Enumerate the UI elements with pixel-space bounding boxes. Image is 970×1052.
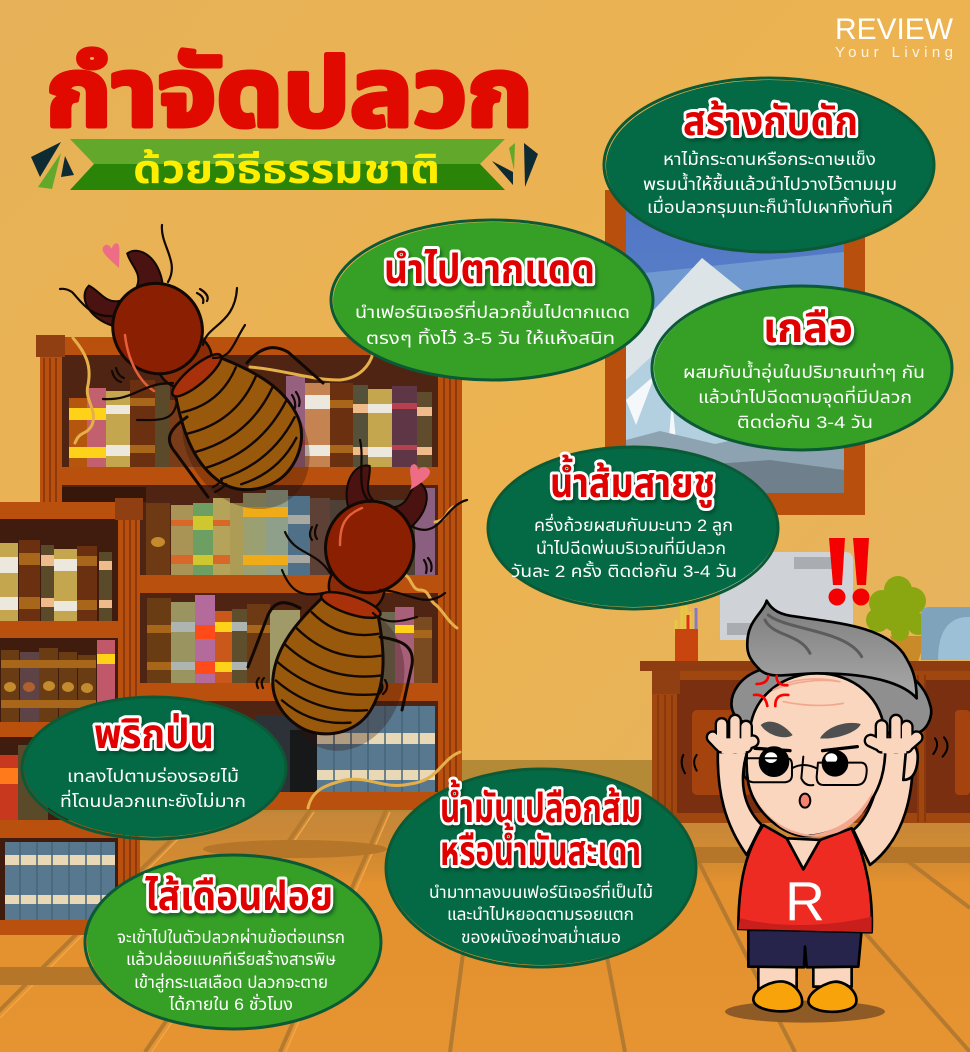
panel: sunlight: นำไปตากแดด [384, 246, 595, 292]
panel: chili [22, 697, 286, 839]
panel: sunlight: นำเฟอร์นิเจอร์ที่ปลวกขึ้นไปตากแดด [355, 300, 630, 322]
books: front third shelf [0, 745, 48, 820]
shirt: R [785, 870, 825, 932]
books: third shelf [147, 595, 432, 683]
panel: chili: พริกป่น [94, 711, 214, 757]
desk body [640, 661, 970, 823]
dado panel [0, 760, 970, 820]
panel: orange oil: หรือน้ำมันสะเดา [440, 822, 641, 874]
wooden floor [0, 810, 970, 1052]
back bookcase [36, 335, 462, 810]
back hair [731, 670, 931, 733]
books: bottom shelf [255, 706, 435, 792]
panel: orange oil: ของผนังอย่างสม่ำเสมอ [461, 925, 621, 947]
icon: heart 1 [103, 243, 119, 268]
panel: chili: ที่โดนปลวกแทะยังไม่มาก [60, 789, 246, 811]
exclamation marks [828, 538, 870, 606]
front bookcase [0, 498, 143, 935]
panel: salt: เกลือ [763, 305, 853, 351]
panel: salt [652, 286, 952, 450]
books: second shelf [146, 488, 435, 575]
shirt [738, 825, 872, 932]
panel: vinegar: น้ำส้มสายชู [550, 454, 715, 508]
logo: Your Living [835, 44, 953, 61]
panel: nematodes: จะเข้าไปในตัวปลวกผ่านข้อต่อแทรก [117, 927, 345, 947]
panel: nematodes [85, 854, 381, 1029]
arms [718, 740, 913, 865]
panel: vinegar: ครึ่งถ้วยผสมกับมะนาว 2 ลูก [534, 513, 733, 537]
termite trails [73, 338, 460, 808]
panel: traps: หาไม้กระดานหรือกระดาษแข็ง [663, 149, 876, 169]
panel: chili: เทลงไปตามร่องรอยไม้ [67, 766, 239, 786]
books: top shelf [69, 376, 432, 467]
nose [801, 757, 813, 785]
mouth [800, 794, 810, 808]
desk with items [640, 552, 970, 823]
legs [758, 963, 852, 988]
panel: nematodes: ได้ภายใน 6 ชั่วโมง [168, 993, 293, 1014]
panel: orange oil [386, 769, 697, 967]
head [747, 673, 885, 836]
books: front second shelf [1, 640, 115, 722]
eyebrows [761, 722, 861, 739]
glasses [744, 758, 867, 785]
panel: salt: ติดต่อกัน 3-4 วัน [737, 413, 873, 432]
logo [835, 13, 954, 61]
shadow [725, 1001, 885, 1023]
hands [713, 721, 917, 753]
shoes [753, 981, 856, 1012]
panel: traps: พรมน้ำให้ชื้นแล้วนำไปวางไว้ตามมุม [643, 172, 897, 195]
icon: heart 2 [410, 464, 430, 490]
panel: traps [604, 78, 934, 252]
termite 1 [60, 225, 336, 534]
ribbon subtitle [70, 139, 505, 192]
ribbon decoration left [31, 142, 74, 189]
panel: nematodes: เข้าสู่กระแสเลือด ปลวกจะตาย [134, 972, 328, 994]
panel: vinegar: วันละ 2 ครั้ง ติดต่อกัน 3-4 วัน [511, 560, 737, 581]
panel: orange oil: และนำไปหยอดตามรอยแตก [447, 905, 634, 924]
shorts [748, 930, 862, 967]
panel: sunlight [331, 220, 653, 380]
logo: REVIEW [835, 13, 954, 46]
panel: salt: ผสมกับน้ำอุ่นในปริมาณเท่าๆ กัน [683, 360, 925, 383]
shake marks [682, 737, 947, 773]
character: angry man [682, 601, 947, 1023]
eyes [755, 747, 857, 776]
pencil cup [675, 604, 698, 661]
title: กำจัดปลวก [46, 40, 533, 147]
monitor [720, 552, 853, 640]
books: front top shelf [0, 540, 112, 621]
books: front bottom shelf [5, 842, 115, 920]
panel: vinegar [487, 447, 778, 609]
blue object [921, 607, 970, 660]
panel: vinegar: นำไปฉีดพ่นบริเวณที่มีปลวก [536, 536, 726, 558]
ribbon subtitle: ด้วยวิธีธรรมชาติ [133, 147, 440, 192]
panel: nematodes: แล้วปล่อยแบคทีเรียสร้างสารพิษ [126, 949, 336, 969]
panel: salt: แล้วนำไปฉีดตามจุดที่มีปลวก [698, 385, 912, 408]
window with mountain view [605, 190, 865, 515]
panel: orange oil: นำมาทาลงบนเฟอร์นิเจอร์ที่เป็นไม้ [429, 880, 653, 902]
ribbon decoration right [492, 143, 538, 187]
panel: nematodes: ไส้เดือนฝอย [145, 873, 333, 919]
panel: traps: เมื่อปลวกรุมแทะก็นำไปเผาทิ้งทันที [647, 195, 893, 218]
termite 2 [248, 440, 467, 766]
potted plant [866, 576, 929, 662]
ear [903, 743, 918, 780]
panel: orange oil: น้ำมันเปลือกส้ม [440, 779, 641, 831]
panel: traps: สร้างกับดัก [683, 98, 858, 144]
front hair [747, 601, 917, 698]
panel: sunlight: ตรงๆ ทิ้งไว้ 3-5 วัน ให้แห้งสนิท [366, 327, 615, 348]
anger mark [754, 676, 788, 706]
